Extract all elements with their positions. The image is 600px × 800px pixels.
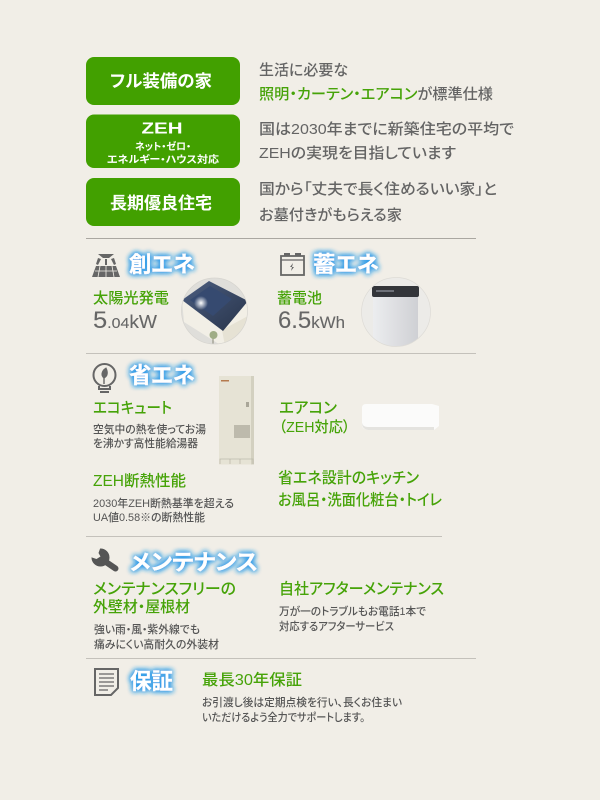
badge: long-life quality housing: 長期優良住宅: [110, 194, 212, 213]
icon: wrench: [89, 546, 116, 568]
badge: ZEH: ネット・ゼロ・: [135, 140, 191, 153]
text: insulation description: 2030年ZEH断熱基準を超える: [93, 496, 234, 510]
icon: battery: [281, 253, 304, 275]
label: EcoCute: エコキュート: [93, 400, 172, 417]
badge: full equipment: [86, 57, 240, 105]
label: air conditioner: エアコン: [279, 400, 337, 417]
value: 5.04 kW: 5.04kW: [93, 307, 157, 334]
icon: solar panel: [92, 254, 120, 277]
label: ZEH insulation: ZEH断熱性能: [93, 472, 186, 490]
label: storage battery: 蓄電池: [277, 290, 322, 307]
label: in-house after-sales: 自社アフターメンテナンス: [279, 580, 444, 598]
value: 6.5 kWh: 6.5kWh: [278, 307, 345, 334]
text: full equipment description: 生活に必要な: [259, 62, 348, 79]
image: solar house: [182, 278, 248, 346]
label: air conditioner: （ZEH対応）: [279, 419, 350, 436]
text: warranty description: [202, 695, 402, 724]
text: insulation description: [93, 496, 234, 524]
text: warranty description: いただけるよう全力でサポートします。: [202, 710, 365, 724]
label: maintenance-free exterior: メンテナンスフリーの: [93, 581, 236, 598]
label: 30-year warranty: 最長30年保証: [202, 671, 302, 689]
label: air conditioner: [279, 400, 350, 436]
panel: energy storage: [277, 252, 430, 350]
panel: maintenance: [89, 546, 444, 651]
heading: energy storage: 蓄エネ: [313, 252, 379, 277]
text: insulation description: UA値0.58※の断熱性能: [93, 510, 205, 524]
label: energy-saving kitchen and bath: お風呂・洗面化粧台・トイレ: [278, 491, 442, 509]
label: energy-saving kitchen and bath: [278, 469, 442, 509]
panel: energy saving: [93, 363, 442, 524]
heading: warranty: 保証: [130, 669, 173, 694]
text: after-sales description: 対応するアフターサービス: [279, 619, 394, 633]
badge: full equipment: フル装備の家: [110, 71, 212, 91]
heading: energy saving: 省エネ: [129, 363, 195, 388]
heading: energy creation: 創エネ: [129, 252, 195, 277]
icon: document: [95, 669, 118, 695]
text: warranty description: お引渡し後は定期点検を行い、長くお住まい: [202, 695, 402, 709]
panel: warranty: [95, 669, 402, 724]
text: exterior description: 強い雨・風・紫外線でも: [94, 622, 200, 636]
text: exterior description: 痛みにくい高耐久の外装材: [94, 637, 219, 651]
text: long-life description: お墓付きがもらえる家: [259, 206, 402, 224]
badge: ZEH: [86, 114, 240, 168]
text: full equipment description: [259, 62, 493, 103]
image: air conditioner: [362, 404, 439, 430]
text: after-sales description: 万が一のトラブルもお電話1本で: [279, 604, 426, 618]
label: maintenance-free exterior: [93, 581, 236, 616]
text: EcoCute description: [93, 422, 206, 450]
label: maintenance-free exterior: 外壁材・屋根材: [93, 598, 190, 616]
badge: long-life quality housing: [86, 178, 240, 226]
text: long-life description: 国から「丈夫で長く住めるいい家」と: [259, 181, 497, 198]
image: EcoCute water heater: [219, 376, 254, 464]
image: battery unit: [372, 286, 419, 346]
icon: light bulb leaf: [94, 364, 116, 392]
text: EcoCute description: 空気中の熱を使ってお湯: [93, 422, 206, 436]
text: after-sales description: [279, 604, 426, 633]
text: EcoCute description: を沸かす高性能給湯器: [93, 436, 198, 450]
text: ZEH description: ZEHの実現を目指しています: [259, 145, 456, 162]
text: ZEH description: [259, 120, 514, 162]
label: energy-saving kitchen and bath: 省エネ設計のキッチン: [278, 469, 419, 487]
text: exterior description: [94, 622, 219, 651]
text: full equipment description: 照明・カーテン・エアコンが標準仕様: [259, 85, 493, 103]
heading: maintenance: メンテナンス: [130, 550, 258, 575]
badge: ZEH: ZEH: [142, 120, 182, 138]
badge: ZEH: エネルギー・ハウス対応: [107, 153, 219, 166]
text: long-life description: [259, 181, 497, 224]
panel: features summary: [86, 57, 514, 226]
text: ZEH description: 国は2030年までに新築住宅の平均で: [259, 120, 514, 138]
label: solar power: 太陽光発電: [93, 290, 169, 307]
panel: energy creation: [92, 252, 248, 346]
